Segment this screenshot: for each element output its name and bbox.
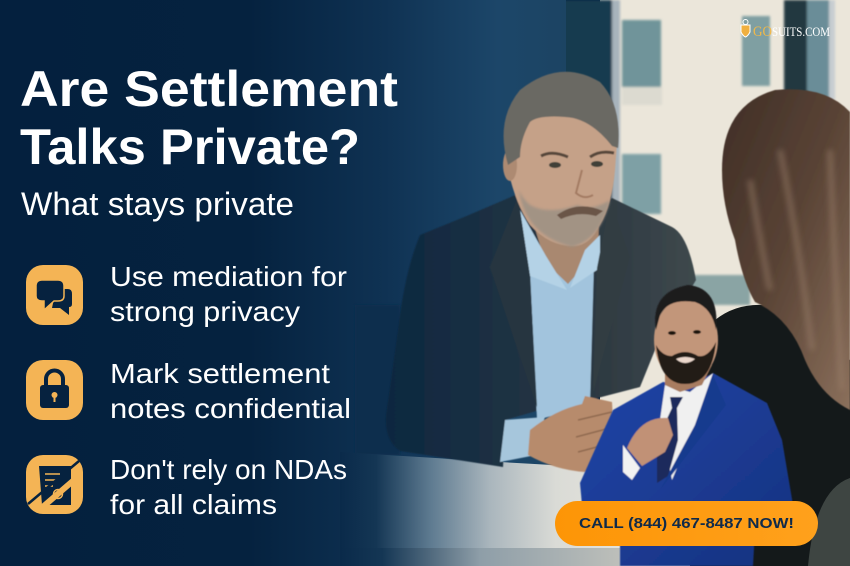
subtitle: What stays private: [21, 186, 294, 222]
list item: mediation: [26, 261, 347, 327]
list item: NDAs: [26, 454, 347, 520]
title: Talks Private?: [20, 119, 360, 175]
text: for all claims: [110, 489, 277, 520]
table: [340, 452, 640, 566]
collar right: [570, 235, 600, 288]
text: notes confidential: [110, 393, 351, 424]
icon: chat bubbles: [26, 265, 83, 325]
illustration: attorney in blue suit: [580, 285, 793, 566]
stubble: [519, 190, 610, 247]
text: [110, 454, 347, 520]
cuff: [623, 445, 640, 480]
text: Use mediation for: [110, 261, 347, 292]
clasped hands: [528, 396, 618, 472]
hair: [655, 285, 716, 330]
hair: [504, 72, 619, 165]
lapel: [660, 375, 726, 490]
tie: [657, 397, 683, 483]
logo: GO: [753, 24, 772, 40]
ear: [503, 149, 517, 181]
shirt: [660, 373, 713, 480]
text: Mark settlement: [110, 358, 330, 389]
raised hand: [627, 418, 673, 466]
text: Don't rely on NDAs: [110, 454, 347, 485]
jacket: [386, 193, 696, 467]
beard: [656, 342, 716, 384]
logo: SUITS.COM: [772, 24, 830, 39]
facial features: [541, 152, 614, 157]
neck: [665, 365, 712, 392]
shirt: [530, 262, 594, 420]
suit: [580, 373, 793, 566]
title: Are Settlement: [20, 61, 398, 117]
illustration: man in dark jacket: [386, 72, 696, 472]
text: [110, 358, 351, 424]
neck: [525, 195, 600, 284]
face: [654, 298, 718, 382]
call to action button: CALL (844) 467-8487 NOW!: [579, 516, 794, 532]
call to action button: [555, 501, 818, 546]
logo: [741, 20, 830, 40]
text: strong privacy: [110, 296, 300, 327]
eyes: [668, 331, 676, 335]
list item: confidential: [26, 358, 351, 424]
head: [508, 80, 618, 246]
illustration: woman seen from behind: [690, 89, 850, 566]
title: [20, 61, 398, 175]
icon: padlock: [26, 360, 83, 420]
collar left: [520, 210, 567, 290]
icon: crossed-out document: [26, 455, 83, 514]
text: [110, 261, 347, 327]
lapels: [490, 197, 537, 407]
shirt cuff: [500, 417, 545, 462]
